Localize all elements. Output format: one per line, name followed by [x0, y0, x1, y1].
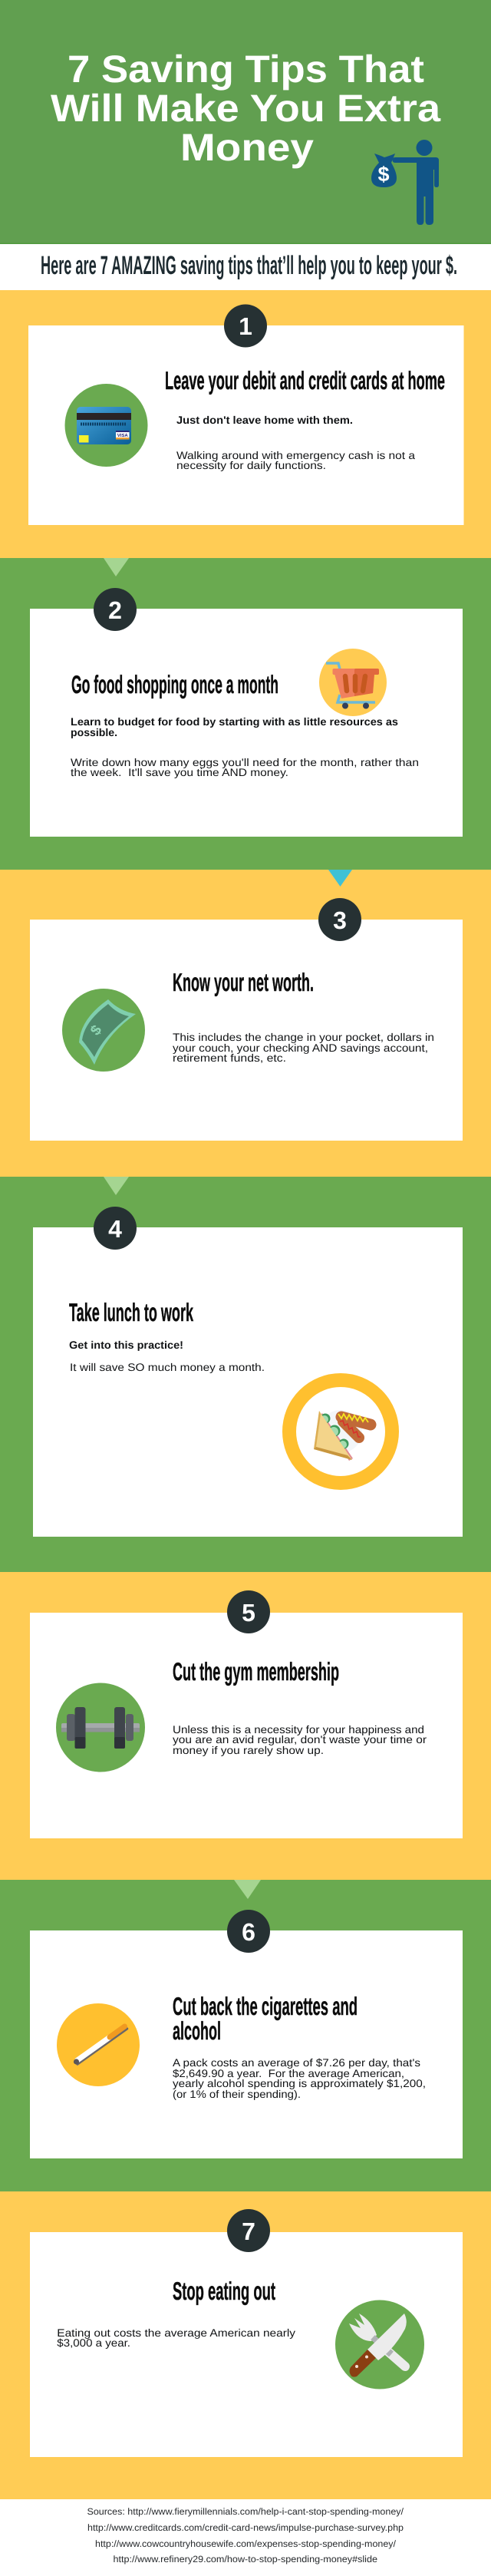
number badge 4: 4 [108, 1215, 122, 1243]
heading 6 [173, 1992, 358, 2045]
text block 6: $2,649.90 a year. For the average American, [173, 2067, 404, 2079]
icon: cigarette [57, 2003, 140, 2086]
title: 7 Saving Tips That [68, 48, 424, 91]
text block 2 [71, 715, 419, 778]
icon: dollar bill [62, 989, 145, 1072]
text block 1 [176, 414, 415, 471]
text block 2: the week. It'll save you time AND money. [71, 766, 288, 778]
text block 1: necessity for daily functions. [176, 459, 326, 471]
text block 3 [173, 1031, 434, 1064]
number badge 1 [224, 304, 267, 347]
text block 2: Write down how many eggs you'll need for the month, rather than [71, 756, 419, 768]
card 7 [30, 2232, 463, 2457]
number badge 6: 6 [242, 1918, 255, 1946]
text block 4: Get into this practice! [69, 1339, 183, 1351]
number badge 2 [94, 588, 137, 631]
sources: http://www.cowcountryhousewife.com/expenses-stop-spending-money/ [95, 2538, 397, 2549]
number badge 4 [94, 1207, 137, 1250]
heading 4: Take lunch to work [69, 1298, 193, 1326]
number badge 5 [227, 1590, 270, 1633]
text block 5: Unless this is a necessity for your happiness and [173, 1723, 424, 1735]
text block 3: retirement funds, etc. [173, 1052, 286, 1064]
panel: tip 3 [0, 870, 491, 1177]
heading 7: Stop eating out [173, 2277, 275, 2305]
number badge 7 [227, 2209, 270, 2252]
title [51, 48, 441, 169]
number badge 2: 2 [108, 596, 122, 624]
text block 1: Walking around with emergency cash is not a [176, 449, 415, 461]
text block 5: money if you rarely show up. [173, 1744, 324, 1756]
card 5 [30, 1613, 463, 1838]
icon: knife and fork [335, 2300, 424, 2389]
number badge 3: 3 [333, 907, 347, 934]
card 4 [33, 1227, 463, 1537]
panel: tip 1 [0, 290, 491, 558]
text block 3: This includes the change in your pocket, dollars in [173, 1031, 434, 1043]
card 3 [30, 920, 463, 1141]
arrow 5 to 6 [234, 1880, 261, 1899]
heading 6: alcohol [173, 2016, 221, 2045]
heading 5: Cut the gym membership [173, 1657, 339, 1686]
text block 6: yearly alcohol spending is approximately $1,200, [173, 2077, 426, 2089]
icon: lunch plate [289, 1380, 392, 1483]
panel: tip 6 [0, 1880, 491, 2191]
heading 2: Go food shopping once a month [71, 670, 278, 698]
title: Money [180, 126, 314, 169]
text block 6: (or 1% of their spending). [173, 2088, 301, 2100]
text block 7 [57, 2327, 295, 2349]
icon: credit card [64, 384, 147, 467]
number badge 7: 7 [242, 2218, 255, 2245]
arrow 2 to 3 [328, 870, 352, 887]
text block 6 [173, 2056, 426, 2100]
text block 1: Just don't leave home with them. [176, 414, 353, 426]
text block 2: possible. [71, 726, 117, 738]
number badge 5: 5 [242, 1599, 255, 1627]
icon: credit card: VISA [117, 433, 128, 438]
text block 6: A pack costs an average of $7.26 per day, that's [173, 2056, 420, 2069]
text block 5 [173, 1723, 427, 1756]
icon: shopping cart [319, 649, 387, 716]
arrow 1 to 2 [104, 558, 129, 576]
sources [87, 2506, 404, 2564]
heading 3: Know your net worth. [173, 968, 314, 996]
icon: dollar bill: $ [87, 1022, 105, 1039]
icon: dumbbell [56, 1683, 145, 1772]
card 2 [30, 609, 463, 837]
text block 2: Learn to budget for food by starting with as little resources as [71, 715, 398, 728]
number badge 6 [227, 1910, 270, 1953]
text block 7: Eating out costs the average American nearly [57, 2327, 295, 2339]
number badge 3 [318, 898, 361, 941]
panel: tip 4 [0, 1177, 491, 1572]
text block 4: It will save SO much money a month. [70, 1361, 265, 1373]
text block 7: $3,000 a year. [57, 2337, 130, 2349]
icon: person holding money bag [371, 140, 439, 225]
sources: http://www.creditcards.com/credit-card-news/impulse-purchase-survey.php [87, 2522, 404, 2533]
title: Will Make You Extra [51, 87, 441, 130]
card 1 [28, 325, 463, 525]
text block 4 [69, 1339, 265, 1373]
header banner [0, 0, 491, 244]
sources: http://www.refinery29.com/how-to-stop-spending-money#slide [114, 2554, 377, 2564]
panel: tip 5 [0, 1572, 491, 1880]
text block 5: you are an avid regular, don't waste your time or [173, 1733, 427, 1745]
arrow 3 to 4 [104, 1177, 129, 1195]
panel: tip 7 [0, 2191, 491, 2499]
text block 3: your couch, your checking AND savings account, [173, 1042, 428, 1054]
panel: tip 2 [0, 558, 491, 870]
icon: person holding money bag: $ [377, 163, 390, 186]
sources: Sources: http://www.fierymillennials.com/help-i-cant-stop-spending-money/ [87, 2506, 404, 2517]
card 6 [30, 1930, 463, 2158]
number badge 1: 1 [239, 312, 252, 340]
